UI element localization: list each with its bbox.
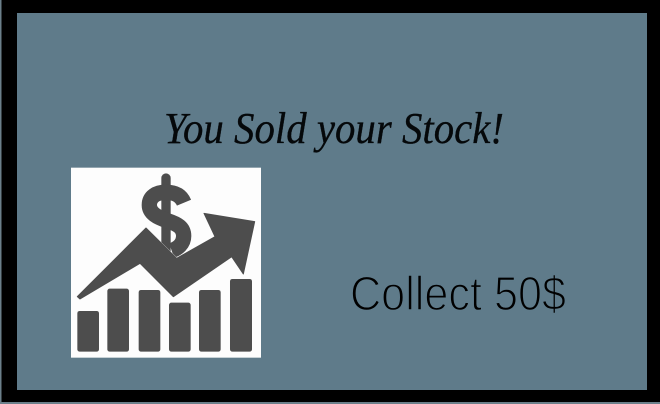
title: You Sold your Stock! bbox=[164, 104, 504, 153]
white gap between dollar and arrow bbox=[140, 225, 217, 261]
icon: rising arrow bbox=[77, 213, 255, 299]
icon: stock chart with dollar sign bbox=[71, 168, 261, 358]
bar chart bbox=[77, 279, 252, 352]
reward text: Collect 50$ bbox=[350, 268, 566, 321]
icon: dollar sign bbox=[149, 178, 184, 252]
